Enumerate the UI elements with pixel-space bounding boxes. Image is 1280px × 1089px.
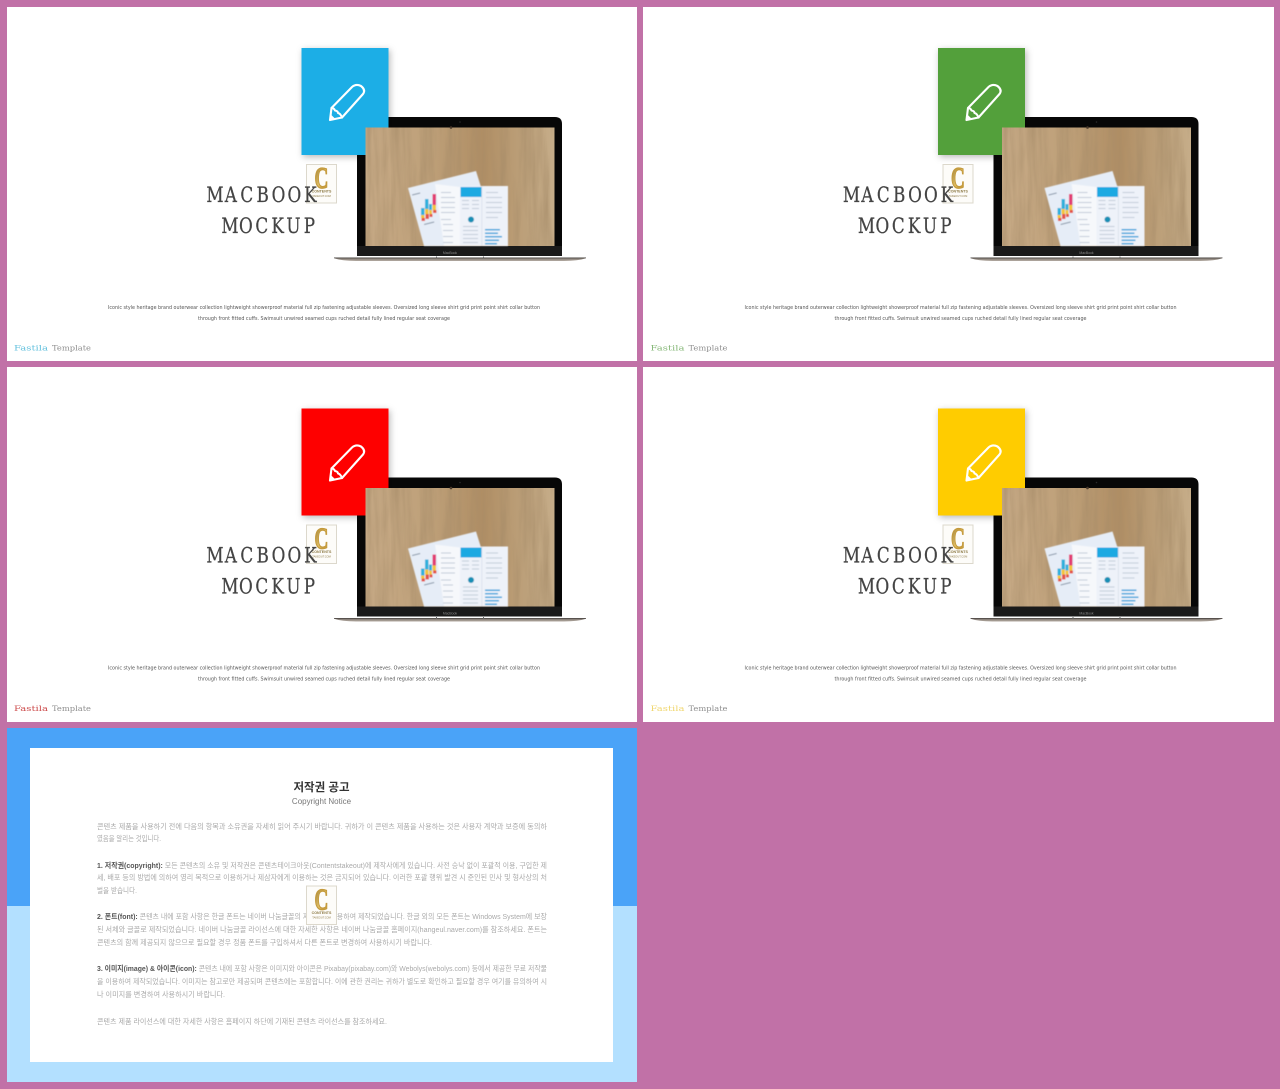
panel: slide red <box>7 367 637 722</box>
notice section 2 <box>97 911 547 947</box>
notice title: 저작권 공고 <box>293 780 350 794</box>
panel: copyright notice <box>7 728 637 1082</box>
watermark logo <box>306 521 336 564</box>
footer brand: Template <box>52 705 91 713</box>
watermark logo <box>306 882 336 924</box>
footer brand <box>650 705 728 713</box>
notice section 1 <box>97 860 547 895</box>
laptop label: MacBook <box>443 251 457 255</box>
footer brand: Template <box>52 344 91 352</box>
notice section 3: 을 이용하여 제작되었습니다. 이미지는 참고로만 제공되며 콘텐츠에는 포함합니다. 이에 관한 권리는 귀하가 별도로 확인하고 필요할 경우 여기를 유의하여 시 <box>97 976 547 986</box>
laptop label: MacBook <box>1079 612 1094 616</box>
notice subtitle: Copyright Notice <box>292 797 352 806</box>
notice intro: 였음을 알리는 것입니다. <box>97 833 161 843</box>
icon: laptop body <box>334 117 586 261</box>
footer brand: Fastila <box>14 344 48 352</box>
footer brand: Fastila <box>14 705 48 713</box>
laptop screen <box>1002 121 1191 246</box>
notice section 2: 된 서체와 글꼴로 제작되었습니다. 네이버 나눔글꼴 라이선스에 대한 자세한 사항은 네이버 나눔글꼴 홈페이지(hangeul.naver.com)를 참조하세요. 폰트는 <box>97 924 547 934</box>
watermark logo <box>943 521 973 564</box>
laptop screen <box>1002 482 1191 606</box>
footer brand <box>14 705 91 713</box>
watermark logo <box>306 160 336 203</box>
notice intro: 콘텐츠 제품을 사용하기 전에 다음의 항목과 소유권을 자세히 읽어 주시기 바랍니다. 귀하가 이 콘텐츠 제품을 사용하는 것은 사용자 계약과 보증에 동의하 <box>97 821 547 831</box>
description: through front fitted cuffs. Swimsuit unwired seamed cups ruched detail fully lined regular seat coverage <box>198 676 451 682</box>
description: Iconic style heritage brand outerwear collection lightweight showerproof material full zip fastening adjustable sleeves. Oversized long sleeve shirt grid print point shirt collar button <box>744 666 1176 672</box>
heading <box>843 544 954 599</box>
notice section 3: 나 이미지를 변경하여 사용하시기 바랍니다. <box>97 989 225 999</box>
description <box>108 666 540 682</box>
footer brand: Fastila <box>650 344 684 352</box>
footer brand: Fastila <box>650 705 684 713</box>
notice section 2: 2. 폰트(font): 콘텐츠 내에 포함 사항은 한글 폰트는 네이버 나눔글꼴의 저작물을 이용하여 제작되었습니다. 한글 외의 모든 폰트는 Windows System에 보장 <box>97 911 547 921</box>
description <box>744 305 1176 322</box>
footer brand: Template <box>688 344 728 352</box>
heading: MACBOOK <box>206 544 317 568</box>
footer brand <box>650 344 728 352</box>
notice license line: 콘텐츠 제품 라이선스에 대한 자세한 사항은 홈페이지 하단에 기재된 콘텐츠 라이선스를 참조하세요. <box>97 1016 387 1026</box>
icon: colored pencil card <box>302 408 388 516</box>
heading: MOCKUP <box>858 214 952 239</box>
laptop label: MacBook <box>1079 251 1094 255</box>
footer brand: Template <box>688 705 728 713</box>
heading: MOCKUP <box>858 575 952 599</box>
panel: slide yellow <box>643 367 1274 722</box>
heading <box>206 544 317 599</box>
notice section 3: 3. 이미지(image) & 아이콘(icon): 콘텐츠 내에 포함 사항은 이미지와 아이콘은 Pixabay(pixabay.com)와 Webolys(webolys.com) 등에서 제공한 무료 저작물 <box>97 963 547 973</box>
notice section 1: 1. 저작권(copyright): 모든 콘텐츠의 소유 및 저작권은 콘텐츠테이크아웃(Contentstakeout)에 제작사에게 있습니다. 사전 승낙 없이 포괄적 이용, 구입한 제 <box>97 860 547 870</box>
heading <box>843 183 954 239</box>
notice intro <box>97 821 547 843</box>
panel: slide blue <box>7 7 637 361</box>
notice section 2: 콘텐츠의 함께 제공되지 않으므로 필요할 경우 정품 폰트를 구입하셔서 다른 폰트로 변경하여 사용하시기 바랍니다. <box>97 937 432 947</box>
description <box>108 305 540 322</box>
icon: colored pencil card <box>302 48 388 155</box>
laptop label: MacBook <box>443 612 457 616</box>
description: Iconic style heritage brand outerwear collection lightweight showerproof material full zip fastening adjustable sleeves. Oversized long sleeve shirt grid print point shirt collar button <box>108 666 540 672</box>
notice section 1: 벌을 받습니다. <box>97 885 137 895</box>
laptop screen <box>366 482 554 606</box>
description: through front fitted cuffs. Swimsuit unwired seamed cups ruched detail fully lined regular seat coverage <box>834 316 1087 322</box>
icon: laptop body <box>970 117 1222 261</box>
heading: MOCKUP <box>221 214 315 239</box>
description: Iconic style heritage brand outerwear collection lightweight showerproof material full zip fastening adjustable sleeves. Oversized long sleeve shirt grid print point shirt collar button <box>744 305 1176 311</box>
notice section 3 <box>97 963 547 999</box>
description: Iconic style heritage brand outerwear collection lightweight showerproof material full zip fastening adjustable sleeves. Oversized long sleeve shirt grid print point shirt collar button <box>108 305 540 311</box>
icon: colored pencil card <box>938 48 1025 155</box>
icon: laptop body <box>334 478 586 622</box>
footer brand <box>14 344 91 352</box>
watermark logo <box>943 160 973 203</box>
heading: MACBOOK <box>206 183 317 208</box>
laptop screen <box>366 121 554 246</box>
description: through front fitted cuffs. Swimsuit unwired seamed cups ruched detail fully lined regular seat coverage <box>198 316 451 322</box>
panel: slide green <box>643 7 1274 361</box>
icon: colored pencil card <box>938 408 1025 516</box>
heading: MACBOOK <box>843 544 954 568</box>
heading: MACBOOK <box>843 183 954 208</box>
description: through front fitted cuffs. Swimsuit unwired seamed cups ruched detail fully lined regular seat coverage <box>834 676 1087 682</box>
icon: laptop body <box>970 478 1222 622</box>
heading: MOCKUP <box>221 575 315 599</box>
notice section 1: 세, 배포 등의 방법에 의하여 영리 목적으로 이용하거나 제삼자에게 이용하는 것은 금지되어 있습니다. 이러한 포괄 행위 발견 시 준인된 민사 및 형사상의 처 <box>97 872 547 882</box>
description <box>744 666 1176 682</box>
heading <box>206 183 317 239</box>
